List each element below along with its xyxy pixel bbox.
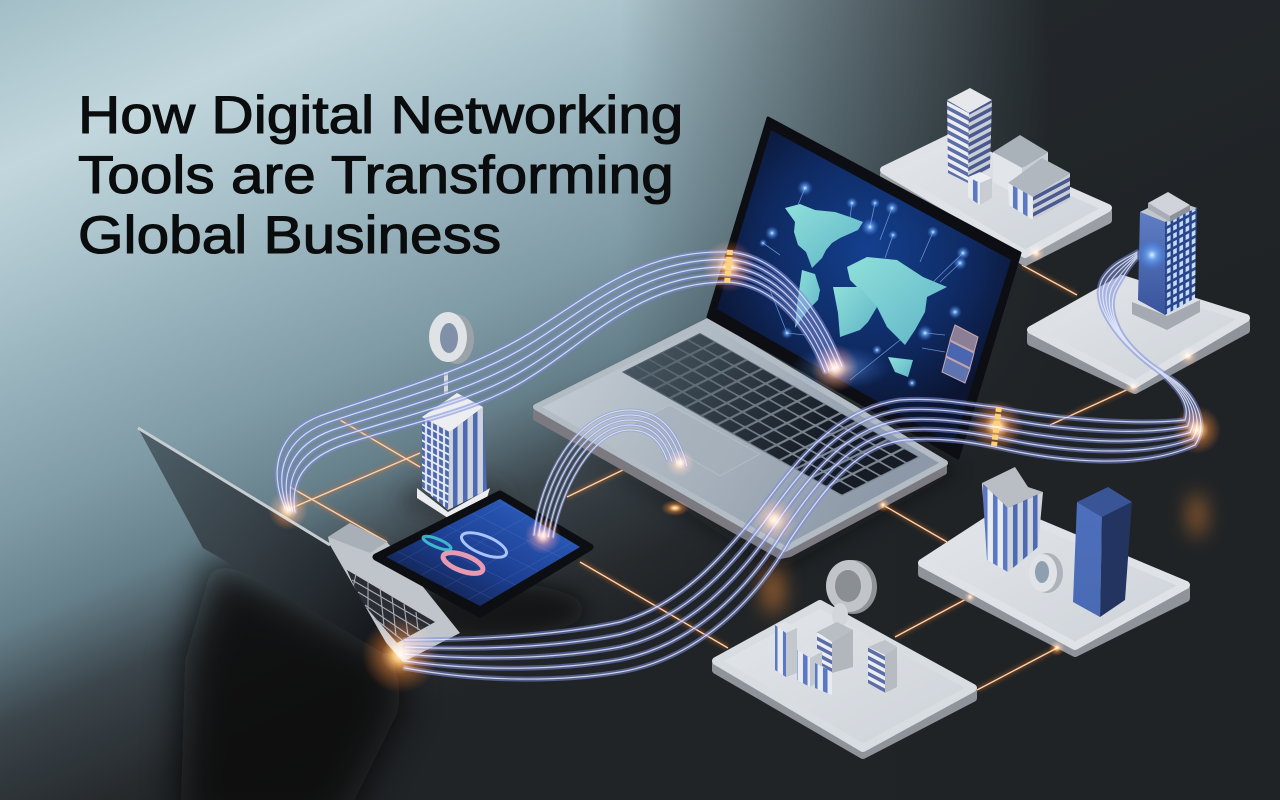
platform: bottom city block xyxy=(716,560,973,755)
large laptop xyxy=(536,118,1020,556)
bundle: left laptop across to right loop xyxy=(405,252,1201,679)
office cluster xyxy=(968,135,1070,220)
laptop base xyxy=(536,321,945,556)
left laptop xyxy=(138,428,460,662)
title: How Digital Networking xyxy=(78,86,683,145)
tablet xyxy=(376,494,590,614)
platform: right blue tower xyxy=(1031,192,1246,390)
title: Tools are Transforming xyxy=(78,146,674,205)
title: Global Business xyxy=(78,206,501,265)
touchpad xyxy=(328,523,387,553)
keyboard xyxy=(622,333,920,496)
blue glass tower xyxy=(1073,487,1132,617)
title xyxy=(78,86,683,265)
floor light reflections xyxy=(763,493,1205,614)
ring marker xyxy=(429,312,474,364)
fiber optic bundles xyxy=(277,252,1201,679)
screen display with world map xyxy=(717,130,1011,445)
ring marker on chimney xyxy=(826,560,877,627)
bundle: left laptop to large laptop xyxy=(277,252,842,512)
bundle: tablet arch xyxy=(534,410,687,537)
base xyxy=(328,523,460,662)
lid back xyxy=(138,428,392,653)
ring marker xyxy=(1029,553,1063,593)
keyboard xyxy=(347,570,435,643)
world map xyxy=(785,204,947,377)
small buildings xyxy=(775,622,897,695)
center office tower with ring xyxy=(400,312,510,522)
laptop screen frame xyxy=(708,118,1020,458)
screen light burst xyxy=(790,346,890,390)
glowing orange connection points xyxy=(268,240,1221,693)
network nodes and rays xyxy=(763,188,963,380)
touchpad xyxy=(632,405,760,476)
platform: top right offices xyxy=(884,88,1108,262)
orange network connection lines xyxy=(287,265,1133,690)
tall office tower xyxy=(947,88,992,183)
fiber clamps xyxy=(727,250,999,446)
screen data panels xyxy=(942,325,978,383)
tablet hologram xyxy=(422,528,510,578)
platform: lower right buildings xyxy=(922,467,1186,653)
blue tower xyxy=(1132,192,1200,330)
white building with slanted roof xyxy=(982,467,1043,572)
floor shadows xyxy=(180,440,960,800)
